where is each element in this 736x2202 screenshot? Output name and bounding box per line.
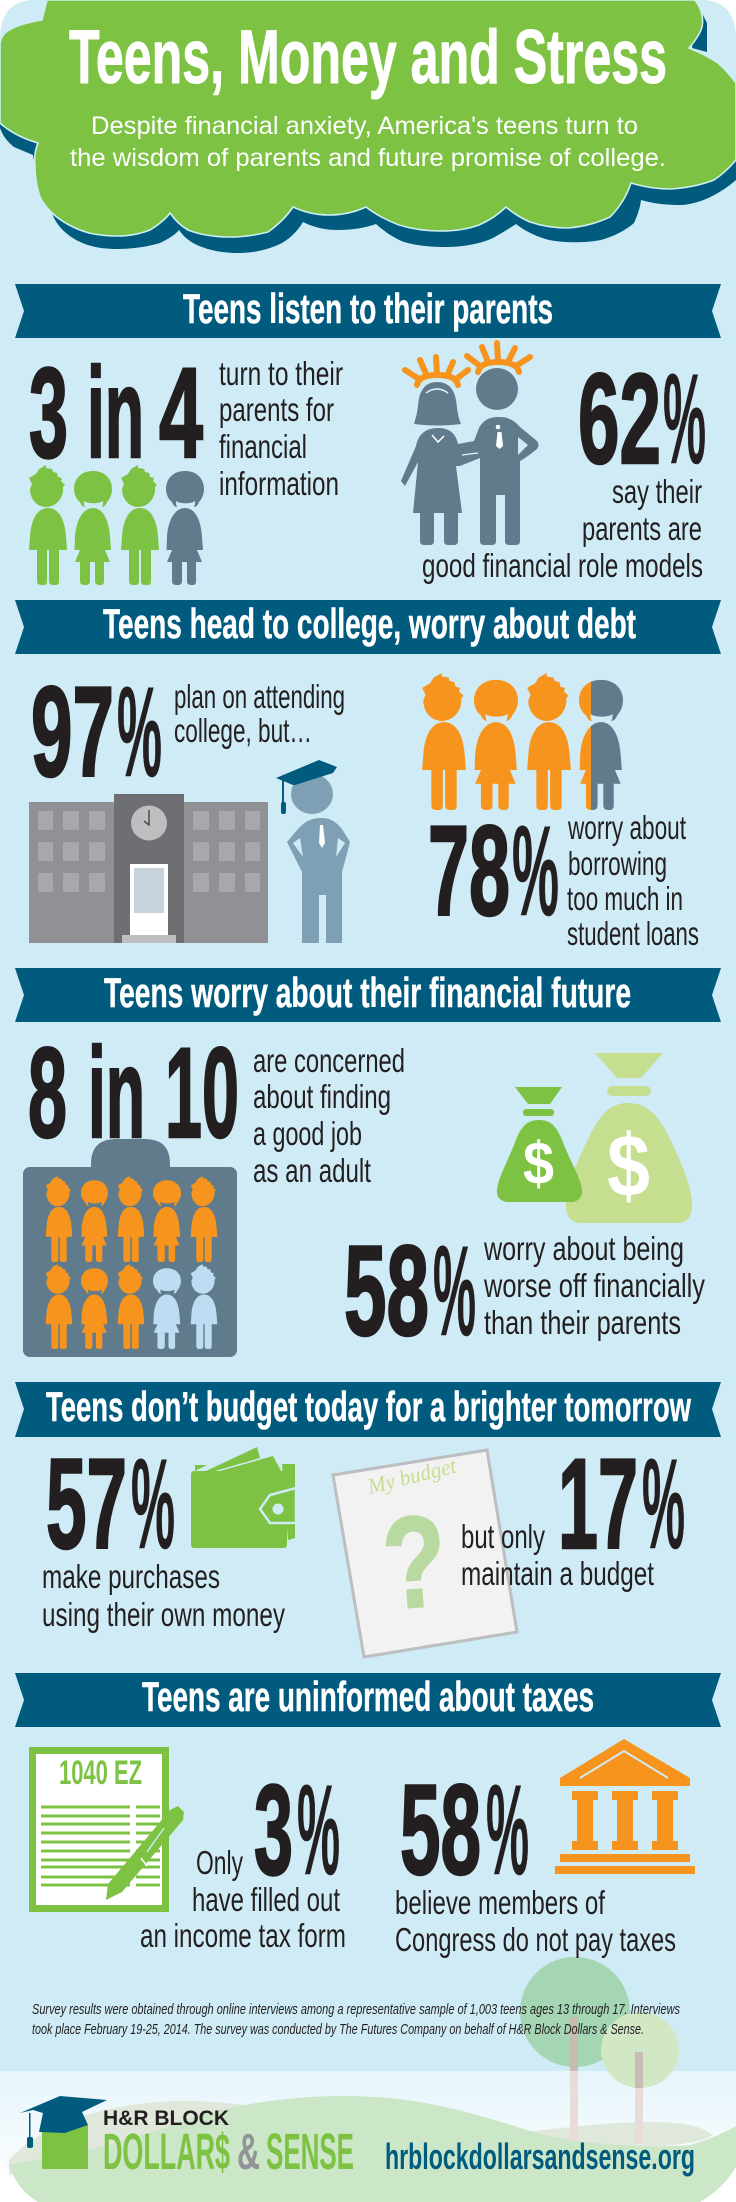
text: worry about borrowing (567, 809, 699, 952)
icon: money bags (497, 1053, 692, 1223)
stat: 3 in 4: in (87, 342, 144, 485)
logo: H&R Block Dollars & Sense: DOLLAR$ (103, 2123, 230, 2180)
text: % (512, 800, 559, 943)
icon: government building (555, 1739, 695, 1874)
stat: 8 in 10 (28, 1022, 239, 1165)
stat: 58% worse off: 58 (344, 1220, 429, 1363)
icon: parents with halos (401, 343, 538, 545)
stat: 3 in 4 (29, 342, 203, 485)
stat: 3%: 3 (254, 1759, 293, 1902)
text: % (486, 1759, 529, 1902)
text: worry about borrowing: borrowing (568, 845, 667, 882)
text: filled out income tax form: an income tax form (140, 1917, 346, 1954)
text: % (297, 1759, 340, 1902)
text: make purchases (42, 1558, 285, 1633)
stat: 58% congress: 58 (400, 1759, 481, 1902)
logo: H&R Block Dollars & Sense: & (237, 2123, 260, 2180)
icon: four teens, three of four green (29, 465, 204, 585)
text: turn to their parents: information (219, 465, 339, 502)
subtitle (70, 112, 666, 172)
stat: 62%: 62 (578, 348, 661, 491)
stat: 17%: 17 (558, 1433, 638, 1576)
text: % (131, 1433, 175, 1576)
text: believe members of congress: believe members of (395, 1884, 606, 1921)
big tree (520, 1957, 630, 2141)
icon: my budget paper (333, 1450, 517, 1657)
stat: 3 in 4: 3 (29, 342, 68, 485)
text: Only: Only (196, 1844, 243, 1881)
icon: my budget paper: ? (378, 1487, 451, 1637)
text: believe members of congress (395, 1884, 676, 1958)
subtitle: Despite financial anxiety, America's teens turn to (91, 112, 638, 140)
text: filled out income tax form (140, 1881, 346, 1954)
text: but only maintain a budget: maintain a budget (461, 1555, 654, 1592)
text: concerned about finding a job: a good job (253, 1115, 362, 1152)
icon: my budget paper: My budget (364, 1453, 459, 1499)
icon: money bags: $ (523, 1130, 554, 1197)
text: concerned about finding a job: are concerned (253, 1042, 405, 1079)
text: % (117, 661, 162, 804)
text: turn to their parents: parents for (219, 391, 334, 428)
logo: H&R Block Dollars & Sense: H&R BLOCK (103, 2107, 229, 2130)
text: filled out income tax form: have filled out (192, 1881, 340, 1918)
text: worse off financially: than their parents (484, 1304, 681, 1341)
icon: 1040 EZ form and pen (32, 1750, 184, 1908)
text: good financial role models (422, 473, 703, 584)
text: worry about borrowing: too much in (567, 880, 683, 917)
header cloud (0, 0, 736, 253)
ground with hills (0, 2071, 736, 2202)
icon: 1040 EZ form and pen: 1040 EZ (59, 1754, 142, 1792)
stat: 97%: 97 (31, 661, 114, 804)
stat: 78%: 78 (428, 800, 510, 943)
stat: 8 in 10: in (88, 1022, 145, 1165)
text: good financial role models: say their (612, 473, 702, 510)
text: worse off financially (483, 1230, 705, 1341)
text: % (433, 1220, 476, 1363)
icon: money bags: $ (607, 1116, 650, 1215)
text: concerned about finding a job: as an adult (253, 1152, 371, 1189)
text: but only maintain a budget (461, 1518, 654, 1592)
text: turn to their parents: financial (219, 428, 307, 465)
text: make purchases: using their own money (42, 1596, 285, 1633)
icon: wallet (191, 1447, 296, 1548)
stat: 8 in 10: 10 (165, 1022, 239, 1165)
stat: 8 in 10: 8 (28, 1022, 67, 1165)
logo: H&R Block Dollars & Sense (20, 2096, 354, 2180)
text: plan on attending college: college, but… (174, 712, 312, 749)
subtitle: the wisdom of parents and future promise of college. (70, 144, 666, 172)
text: plan on attending college: plan on attending (174, 678, 345, 715)
icon: school building (29, 794, 268, 943)
text: plan on attending college (174, 678, 345, 749)
banner: teens listen to their parents (15, 284, 721, 338)
footnote (32, 2001, 680, 2038)
banner: teens listen to their parents: Teens listen to their parents (183, 285, 553, 332)
text: worry about borrowing: worry about (567, 809, 686, 846)
text: but only maintain a budget: but only (461, 1518, 545, 1555)
text: turn to their parents (219, 355, 343, 502)
icon: graduate (276, 760, 350, 943)
logo: H&R Block Dollars & Sense: SENSE (266, 2123, 354, 2180)
stat: 57%: 57 (46, 1433, 127, 1576)
stat: 3 in 4: 4 (159, 342, 203, 485)
icon: four teens, 78 percent orange (422, 673, 623, 810)
small tree (601, 2012, 679, 2143)
icon: briefcase with ten teens (23, 1139, 237, 1357)
text: concerned about finding a job: about finding (253, 1078, 391, 1115)
text: make purchases: make purchases (42, 1558, 220, 1595)
text: concerned about finding a job (253, 1042, 405, 1189)
text: turn to their parents: turn to their (219, 355, 343, 392)
